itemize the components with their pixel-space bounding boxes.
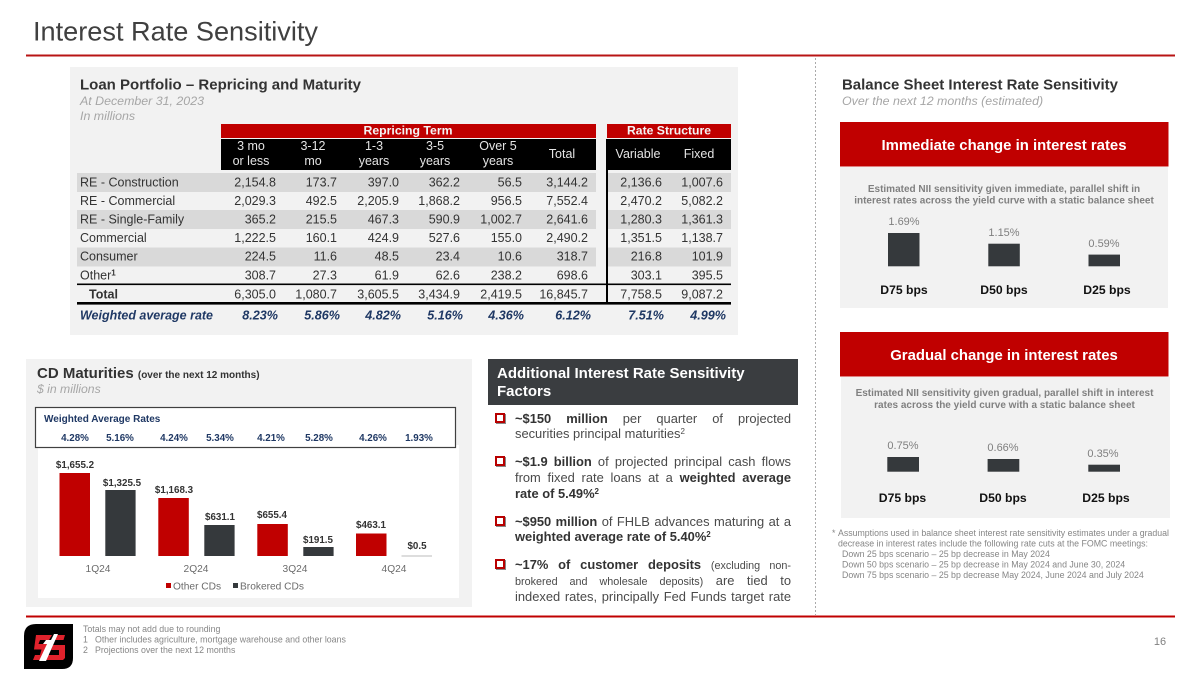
bullet: fixed rate loans: ~$1.9 billion of projected principal cash flows xyxy=(515,454,791,469)
weighted average rates box: 5.28% xyxy=(305,433,333,444)
row: Commercial: 160.1 xyxy=(306,231,337,245)
table header: repricing term: 1-3 xyxy=(365,139,383,153)
row: RE - Single-Family: 1,280.3 xyxy=(620,212,662,226)
bars: other CDs xyxy=(60,473,386,556)
row: weighted average rate: 5.86% xyxy=(304,308,340,322)
weighted average rates box: Weighted Average Rates xyxy=(44,414,161,425)
bullet: fixed rate loans: rate of 5.49%2 xyxy=(515,486,599,501)
bullet: FHLB advances: ~$950 million of FHLB advances maturing at a xyxy=(515,514,791,528)
weighted average rates box: 5.34% xyxy=(206,433,234,444)
additional factors heading: Factors xyxy=(497,383,551,400)
footer notes: 1 xyxy=(83,634,88,644)
bullet: fixed rate loans xyxy=(495,454,791,501)
section heading: balance sheet: Over the next 12 months (estimated) xyxy=(842,94,1043,108)
row: RE - Construction: RE - Construction xyxy=(80,176,179,190)
immediate bar chart: 1.15% xyxy=(988,227,1020,239)
weighted average rates box: 5.16% xyxy=(106,433,134,444)
row: Other: 27.3 xyxy=(313,268,337,282)
bullet: customer deposits xyxy=(495,557,791,604)
CD bar chart xyxy=(56,460,432,592)
bullet: securities maturities xyxy=(495,410,791,441)
gradual bar chart: 0.75% xyxy=(887,440,919,452)
row: Total: 6,305.0 xyxy=(234,288,276,302)
row: Consumer xyxy=(80,250,723,264)
footer notes xyxy=(83,624,346,655)
gradual heading: Gradual change in interest rates xyxy=(890,348,1118,364)
additional factors heading: Additional Interest Rate Sensitivity xyxy=(497,365,745,382)
row: Total xyxy=(89,288,723,302)
row: Total: Total xyxy=(89,288,118,302)
title: Interest Rate Sensitivity xyxy=(33,16,319,46)
bar value labels: $1,168.3 xyxy=(155,485,194,496)
gradual bar chart: 0.66% xyxy=(987,442,1019,454)
bullet: customer deposits: indexed rates, principally Fed Funds target rate xyxy=(515,589,791,604)
CD subheading: $ in millions xyxy=(36,382,101,396)
icon: company logo xyxy=(24,624,73,669)
gradual bar chart: 0.35% xyxy=(1087,448,1119,460)
row: RE - Commercial: 5,082.2 xyxy=(681,194,723,208)
immediate bar chart xyxy=(880,216,1131,297)
loan subheading: In millions xyxy=(80,109,135,123)
row: Commercial: 1,222.5 xyxy=(234,231,276,245)
row: Total: 3,605.5 xyxy=(357,288,399,302)
panel: CD maturities xyxy=(26,359,472,607)
row: Commercial: 155.0 xyxy=(491,231,522,245)
row: weighted average rate: 4.36% xyxy=(487,308,524,322)
row: RE - Commercial: RE - Commercial xyxy=(80,194,175,208)
row: Consumer: 10.6 xyxy=(498,250,522,264)
footer notes: Projections over the next 12 months xyxy=(95,645,236,655)
rate cut assumptions footnote: Assumptions used in balance sheet interest rate sensitivity estimates under a gradual xyxy=(838,528,1169,538)
chart axis labels: 1Q24 xyxy=(86,564,111,575)
table header: rate structure: Variable xyxy=(616,147,661,161)
immediate heading: Immediate change in interest rates xyxy=(882,138,1126,154)
weighted average rates box: 4.26% xyxy=(359,433,387,444)
row: Commercial: 424.9 xyxy=(368,231,399,245)
row: Total: 16,845.7 xyxy=(539,288,588,302)
row: RE - Construction xyxy=(80,176,723,190)
loan subheading xyxy=(79,94,204,123)
additional factors heading xyxy=(488,359,798,405)
row: RE - Construction: 56.5 xyxy=(498,176,522,190)
bars: brokered CDs xyxy=(105,490,432,556)
row: Commercial: 1,351.5 xyxy=(620,231,662,245)
loan subheading: At December 31, 2023 xyxy=(79,94,204,108)
table header: rate structure xyxy=(606,124,731,170)
table header: repricing term: 3 mo xyxy=(237,139,265,153)
row: weighted average rate: 6.12% xyxy=(555,308,591,322)
row: Other: 61.9 xyxy=(375,268,399,282)
weighted average rates box: 1.93% xyxy=(405,433,433,444)
row: RE - Single-Family: 590.9 xyxy=(429,212,460,226)
table header: repricing term: years xyxy=(483,154,513,168)
row: RE - Construction: 173.7 xyxy=(306,176,337,190)
immediate description: Estimated NII sensitivity given immediate, parallel shift in xyxy=(868,184,1140,195)
page number: 16 xyxy=(1154,636,1166,648)
immediate bar chart: D25 bps xyxy=(1083,283,1131,297)
row: Other: 698.6 xyxy=(557,268,588,282)
bar value labels: $463.1 xyxy=(356,520,387,531)
row: weighted average rate: 5.16% xyxy=(427,308,463,322)
gradual bar chart: D75 bps xyxy=(879,491,926,505)
row: weighted average rate xyxy=(80,308,726,322)
row: Other: Other xyxy=(80,268,111,282)
row: Commercial: 2,490.2 xyxy=(546,231,588,245)
immediate bar chart: 0.59% xyxy=(1088,238,1120,250)
row: Other: 303.1 xyxy=(631,268,662,282)
row: RE - Single-Family: 1,361.3 xyxy=(681,212,723,226)
panel: gradual change xyxy=(840,332,1170,518)
section heading: balance sheet: Balance Sheet Interest Rate Sensitivity xyxy=(842,76,1119,94)
row: RE - Single-Family: 1,002.7 xyxy=(480,212,522,226)
table header: repricing term: Over 5 xyxy=(479,139,517,153)
footer notes: Other includes agriculture, mortgage warehouse and other loans xyxy=(95,634,346,644)
bar value labels: $1,655.2 xyxy=(56,460,95,471)
bullet: customer deposits: brokered and wholesale deposits) are tied to xyxy=(515,573,791,588)
row: RE - Commercial xyxy=(80,194,723,208)
row: RE - Construction: 3,144.2 xyxy=(546,176,588,190)
rate cut assumptions footnote: Down 50 bps scenario – 25 bp decrease in May 2024 and June 30, 2024 xyxy=(842,560,1125,570)
row: RE - Construction: 397.0 xyxy=(368,176,399,190)
row: RE - Commercial: 956.5 xyxy=(491,194,522,208)
loan heading: Loan Portfolio – Repricing and Maturity xyxy=(80,76,362,94)
gradual description: Estimated NII sensitivity given gradual, parallel shift in interest xyxy=(856,388,1154,399)
row: RE - Construction: 362.2 xyxy=(429,176,460,190)
table header: repricing term: Total xyxy=(549,147,575,161)
immediate description: interest rates across the yield curve with a static balance sheet xyxy=(854,196,1154,206)
footer notes: Totals may not add due to rounding xyxy=(83,624,221,634)
rate cut assumptions footnote xyxy=(832,528,1169,580)
chart legend: Brokered CDs xyxy=(240,582,304,592)
row: weighted average rate: 7.51% xyxy=(628,308,664,322)
row: Total: 2,419.5 xyxy=(480,288,522,302)
bullet: customer deposits: ~17% of customer deposits (excluding non- xyxy=(515,557,791,572)
section heading: balance sheet xyxy=(842,76,1119,108)
row: Other: 238.2 xyxy=(491,268,522,282)
weighted average rates box xyxy=(36,408,456,448)
chart axis labels: 3Q24 xyxy=(283,564,308,575)
bar value labels: $655.4 xyxy=(257,510,288,521)
row: Consumer: 318.7 xyxy=(557,250,588,264)
row: Consumer: 224.5 xyxy=(245,250,276,264)
row: RE - Commercial: 2,470.2 xyxy=(620,194,662,208)
chart axis labels xyxy=(86,564,407,575)
row: RE - Construction: 2,136.6 xyxy=(620,176,662,190)
immediate bar chart: D50 bps xyxy=(980,283,1028,297)
row: Other: 308.7 xyxy=(245,268,276,282)
footer notes: 2 xyxy=(83,645,88,655)
table header: repricing term: 3-12 xyxy=(300,139,326,153)
gradual bar chart: D25 bps xyxy=(1082,491,1130,505)
row: Other: 62.6 xyxy=(436,268,460,282)
chart axis labels: 2Q24 xyxy=(184,564,209,575)
immediate bar chart: 1.69% xyxy=(888,216,920,228)
rate cut assumptions footnote: Down 75 bps scenario – 25 bp decrease May 2024, June 2024 and July 2024 xyxy=(842,570,1144,580)
immediate description xyxy=(854,184,1154,206)
bullet: FHLB advances: weighted average rate of 5.40%2 xyxy=(515,529,711,544)
table header: repricing term: mo xyxy=(304,154,322,168)
row: Commercial: Commercial xyxy=(80,231,147,245)
row: RE - Single-Family: 2,641.6 xyxy=(546,212,588,226)
bar value labels: $191.5 xyxy=(303,535,334,546)
table header: rate structure: Rate Structure xyxy=(627,124,712,138)
chart legend: Other CDs xyxy=(173,582,221,592)
row: RE - Single-Family: 467.3 xyxy=(368,212,399,226)
row: Consumer: 216.8 xyxy=(631,250,662,264)
bullet: fixed rate loans: from fixed rate loans at a weighted average xyxy=(515,470,791,485)
bullet: securities maturities: securities principal maturities2 xyxy=(515,426,685,441)
panel: immediate change xyxy=(840,122,1168,308)
row: RE - Commercial: 1,868.2 xyxy=(418,194,460,208)
panel: loan portfolio xyxy=(70,67,738,335)
row: Other: 1 xyxy=(111,268,116,278)
row: Consumer: 48.5 xyxy=(375,250,399,264)
CD heading: CD Maturities (over the next 12 months) xyxy=(37,365,260,382)
table header: rate structure: Fixed xyxy=(684,147,714,161)
row: weighted average rate: 8.23% xyxy=(242,308,278,322)
weighted average rates box: 4.24% xyxy=(160,433,188,444)
gradual description xyxy=(856,388,1154,411)
rate cut assumptions footnote: * xyxy=(832,528,836,538)
row: RE - Single-Family: 365.2 xyxy=(245,212,276,226)
chart axis labels: 4Q24 xyxy=(382,564,407,575)
row: Other: 395.5 xyxy=(692,268,723,282)
table header: repricing term: years xyxy=(359,154,389,168)
row: weighted average rate: Weighted average rate xyxy=(80,308,213,322)
row: Total: 9,087.2 xyxy=(681,288,723,302)
immediate bar chart: D75 bps xyxy=(880,283,928,297)
bar value labels: $1,325.5 xyxy=(103,478,142,489)
row: Total: 1,080.7 xyxy=(295,288,337,302)
table header: repricing term: Repricing Term xyxy=(364,124,452,138)
row: Consumer: 101.9 xyxy=(692,250,723,264)
row: Commercial: 1,138.7 xyxy=(681,231,723,245)
gradual bar chart: D50 bps xyxy=(979,491,1027,505)
weighted average rates box: 4.28% xyxy=(61,433,89,444)
chart legend xyxy=(166,582,304,592)
row: weighted average rate: 4.82% xyxy=(364,308,401,322)
bullet: FHLB advances xyxy=(495,514,792,544)
row: Consumer: Consumer xyxy=(80,250,138,264)
row: RE - Construction: 1,007.6 xyxy=(681,176,723,190)
gradual description: rates across the yield curve with a static balance sheet xyxy=(874,400,1136,411)
row: Consumer: 23.4 xyxy=(436,250,460,264)
row: RE - Single-Family: 215.5 xyxy=(306,212,337,226)
row: RE - Commercial: 492.5 xyxy=(306,194,337,208)
rate cut assumptions footnote: Down 25 bps scenario – 25 bp decrease in May 2024 xyxy=(842,549,1050,559)
row: Total: 3,434.9 xyxy=(418,288,460,302)
table header: repricing term: 3-5 xyxy=(426,139,444,153)
row: RE - Single-Family: RE - Single-Family xyxy=(80,212,185,226)
gradual bar chart xyxy=(879,440,1130,505)
row: RE - Single-Family xyxy=(80,212,723,226)
bar value labels: $0.5 xyxy=(407,541,427,552)
row: RE - Commercial: 7,552.4 xyxy=(546,194,588,208)
table row bands xyxy=(77,173,731,266)
row: RE - Commercial: 2,029.3 xyxy=(234,194,276,208)
bar value labels xyxy=(56,460,427,552)
row: RE - Commercial: 2,205.9 xyxy=(357,194,399,208)
table header: repricing term: years xyxy=(420,154,450,168)
row: Consumer: 11.6 xyxy=(314,250,337,264)
row: weighted average rate: 4.99% xyxy=(689,308,726,322)
bar value labels: $631.1 xyxy=(205,512,236,523)
row: Commercial: 527.6 xyxy=(429,231,460,245)
weighted average rates box: 4.21% xyxy=(257,433,285,444)
table header: repricing term xyxy=(221,124,596,170)
row: Other xyxy=(80,268,723,282)
table header: repricing term: or less xyxy=(233,154,269,168)
row: Total: 7,758.5 xyxy=(620,288,662,302)
row: Commercial xyxy=(80,231,723,245)
bullet: securities maturities: ~$150 million per quarter of projected xyxy=(515,410,791,426)
row: RE - Construction: 2,154.8 xyxy=(234,176,276,190)
rate cut assumptions footnote: decrease in interest rates include the following rate cuts at the FOMC meetings: xyxy=(838,538,1148,548)
